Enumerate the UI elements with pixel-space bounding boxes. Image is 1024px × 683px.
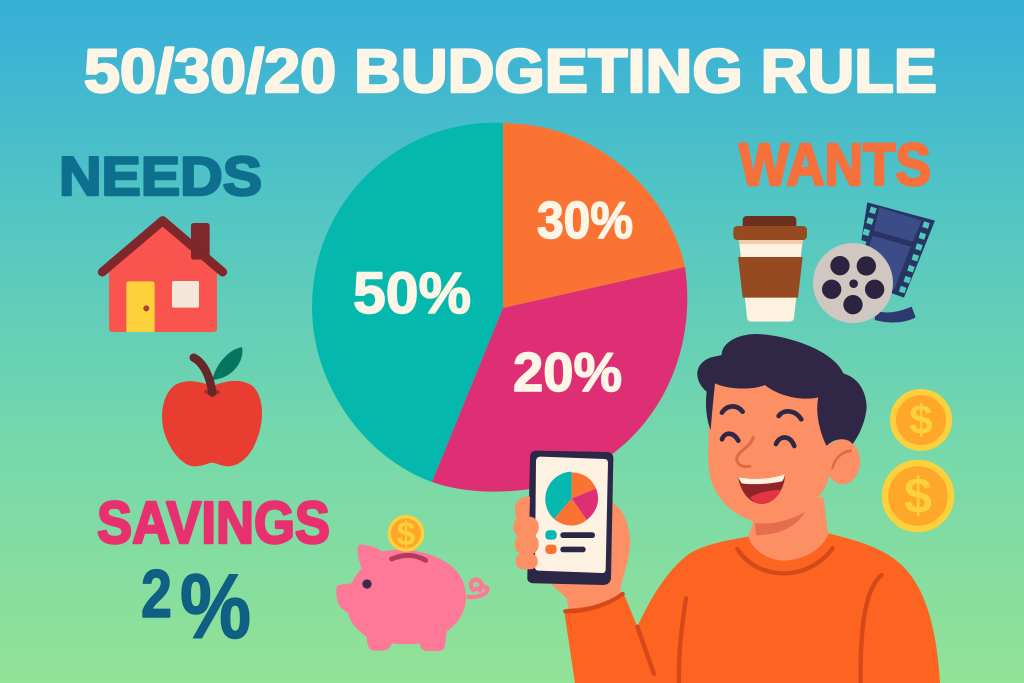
icon: coffee cup bbox=[733, 216, 807, 322]
heading: needs: NEEDS bbox=[59, 145, 262, 207]
icon: dollar coin top bbox=[893, 392, 949, 448]
mouth bbox=[738, 475, 785, 504]
icon: dollar coin top: $ bbox=[909, 396, 933, 443]
fingers bbox=[513, 497, 539, 569]
face bbox=[708, 383, 833, 523]
icon: dollar coin bottom bbox=[885, 463, 951, 529]
title: 50/30/20 BUDGETING RULE bbox=[84, 37, 937, 105]
phone mini pie chart bbox=[545, 472, 598, 526]
icon: piggy bank bbox=[336, 516, 487, 651]
label 30%: 30% bbox=[537, 192, 633, 250]
phone bbox=[527, 451, 613, 585]
pie slice: 30% bbox=[503, 123, 685, 308]
savings value: 2 bbox=[141, 556, 172, 632]
illustration: smiling person holding phone bbox=[513, 334, 940, 683]
icon: apple bbox=[162, 347, 262, 466]
heading: savings: SAVINGS bbox=[97, 490, 330, 556]
coin in slot bbox=[389, 516, 423, 553]
label 20%: 20% bbox=[513, 341, 622, 403]
sweater bbox=[564, 533, 940, 683]
heading: wants: WANTS bbox=[739, 132, 931, 198]
savings value: % bbox=[180, 556, 251, 658]
icon: dollar coin bottom: $ bbox=[904, 468, 932, 524]
pie slice: 50% bbox=[312, 123, 503, 482]
label 50%: 50% bbox=[353, 261, 471, 326]
neck bbox=[748, 497, 828, 561]
nose bbox=[737, 437, 753, 467]
hair bbox=[697, 334, 867, 446]
pie chart bbox=[312, 123, 687, 492]
ear bbox=[825, 439, 860, 484]
icon: house bbox=[102, 221, 223, 332]
savings value bbox=[141, 556, 251, 658]
hand bbox=[550, 502, 630, 608]
pie slice: 20% bbox=[432, 267, 687, 492]
icon: film reel bbox=[813, 202, 935, 323]
eyes and brows bbox=[722, 406, 801, 446]
coin in slot: $ bbox=[397, 516, 416, 553]
